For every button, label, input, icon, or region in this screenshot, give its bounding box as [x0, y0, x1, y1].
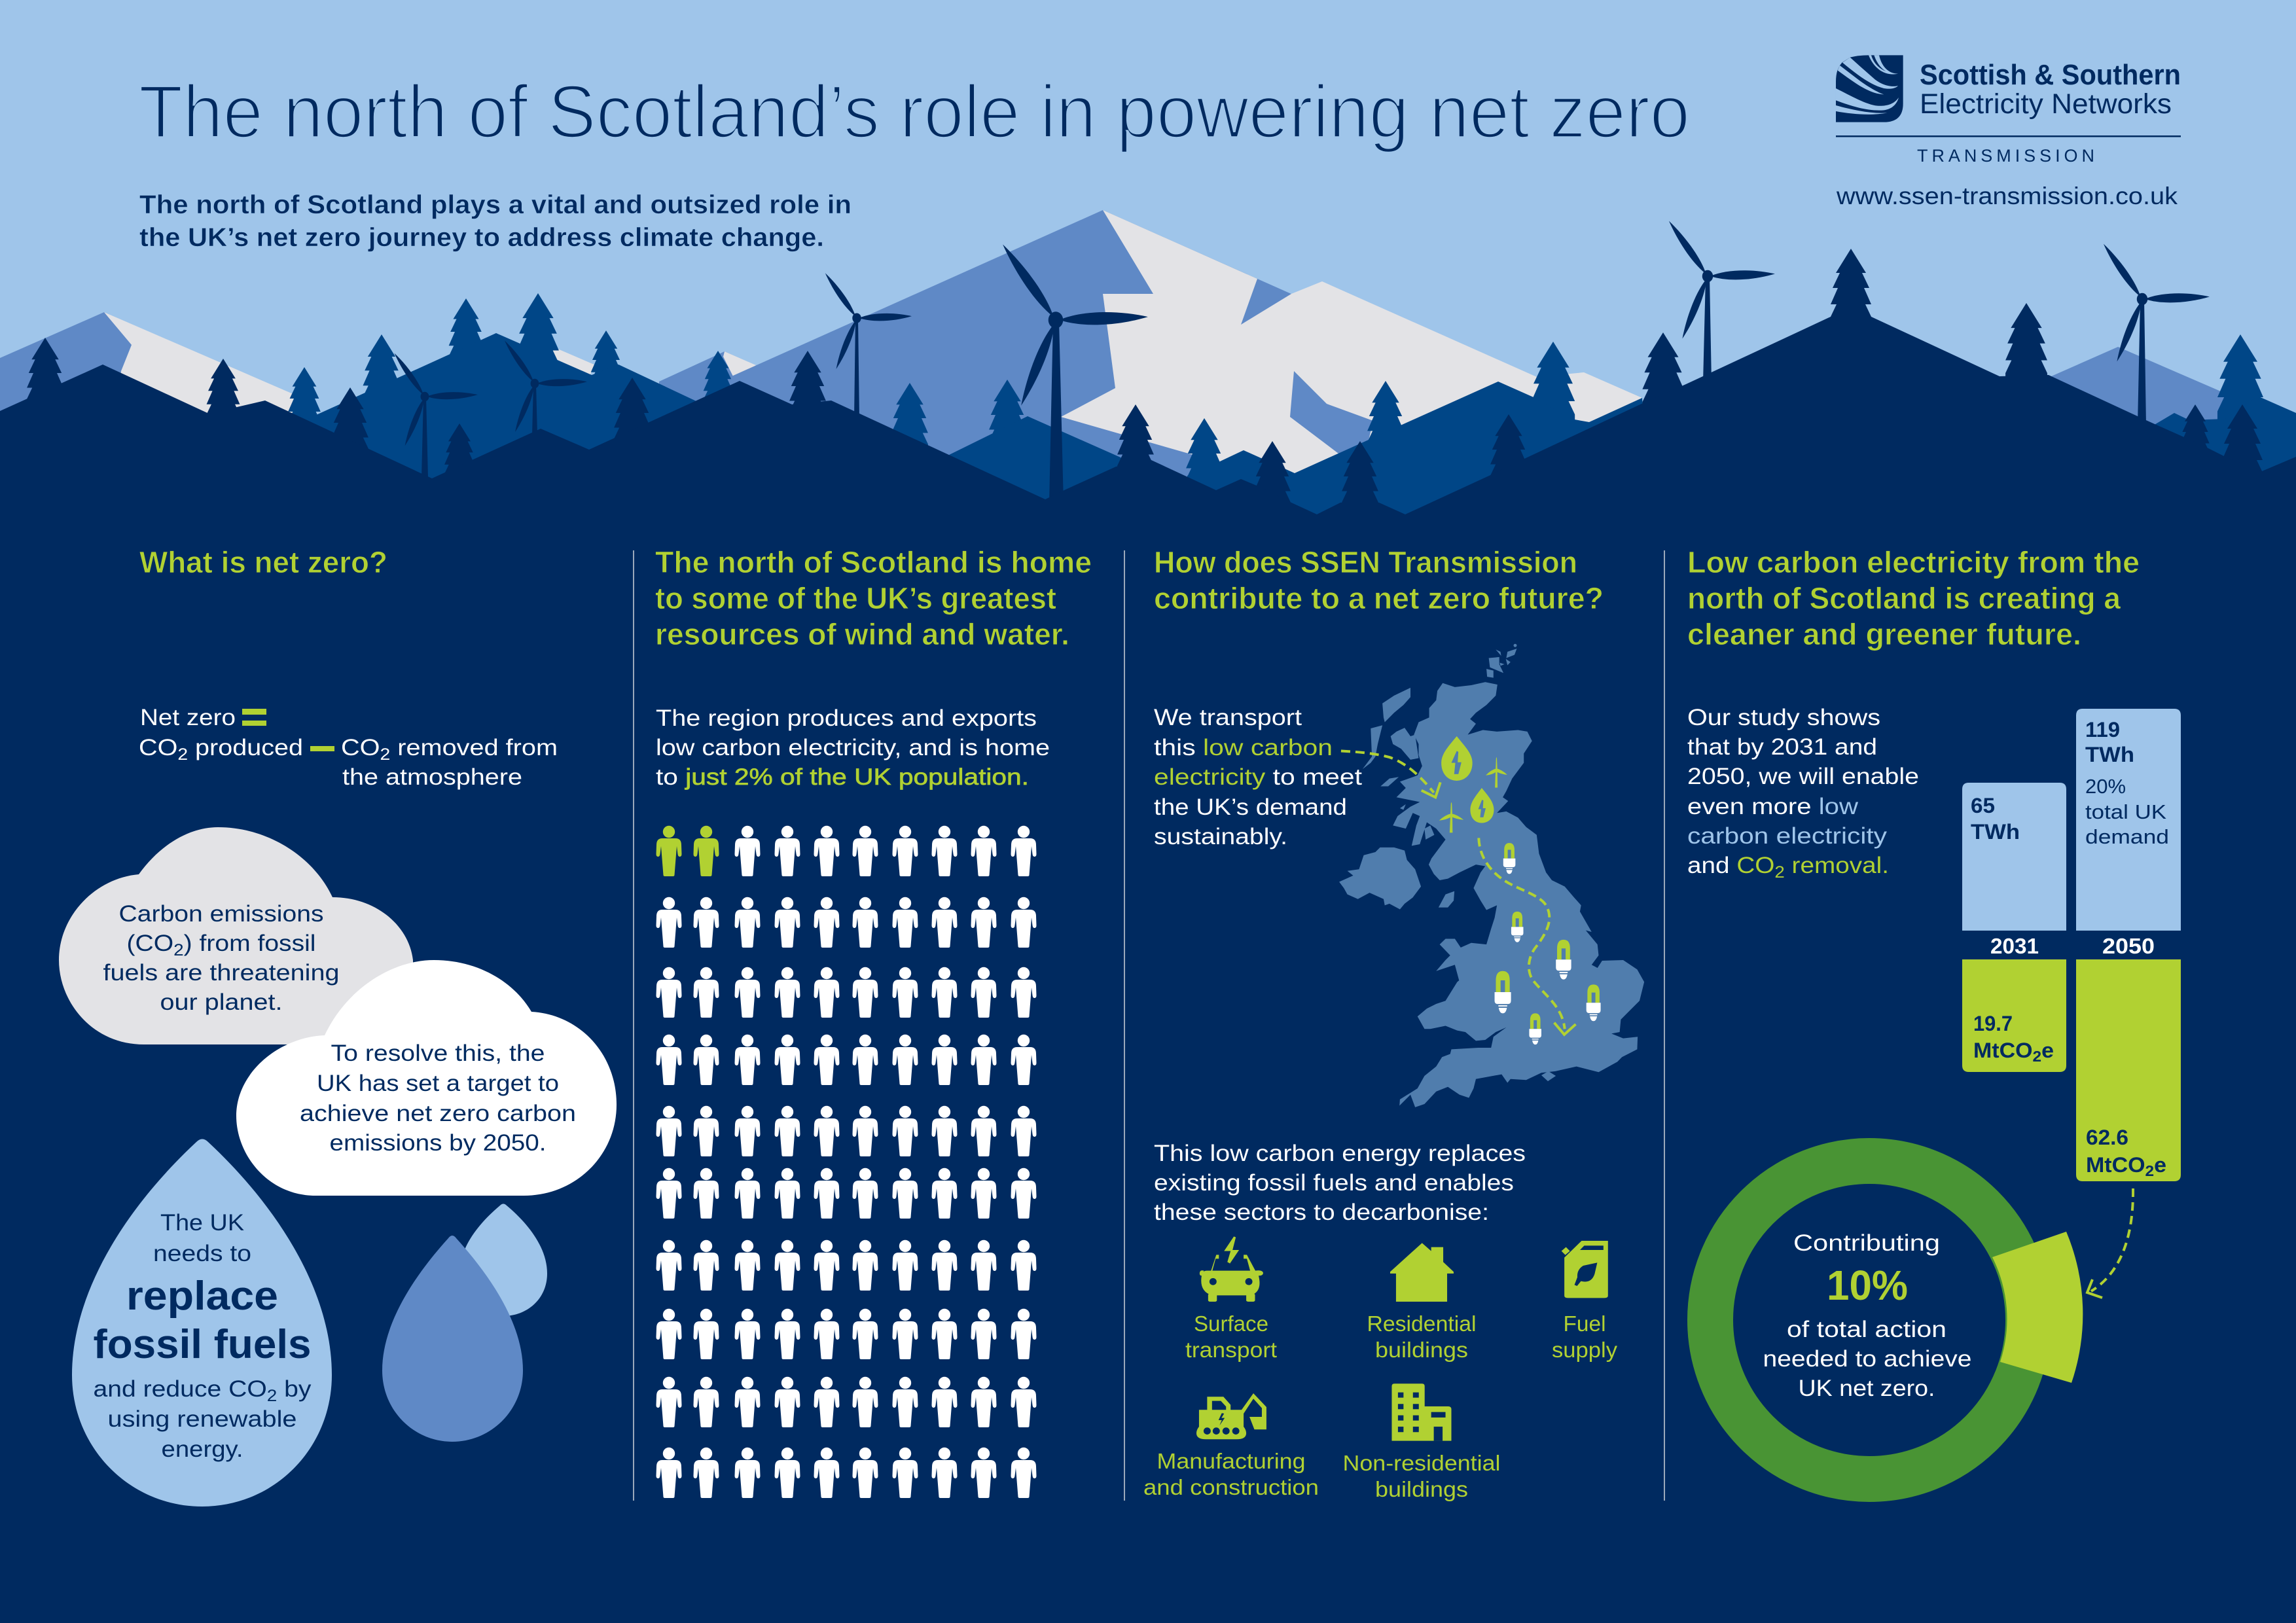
droplet with text: using renewable	[107, 1406, 297, 1432]
heading: to some of the UK’s greatest	[655, 581, 1056, 615]
bar: 65 TWh 2031	[1962, 783, 2066, 931]
cloud: white: emissions by 2050.	[330, 1130, 546, 1156]
cloud: grey: 2	[173, 941, 184, 959]
sector labels	[1143, 1311, 1618, 1501]
body text: sectors intro: existing fossil fuels and enables	[1154, 1170, 1514, 1196]
droplet with text: fossil fuels	[93, 1322, 311, 1367]
equation: the atmosphere	[342, 764, 522, 790]
icon: small water drops	[382, 1204, 547, 1442]
heading	[1154, 545, 1604, 615]
front navy ridge	[0, 317, 2296, 524]
bar: 65 TWh 2031: TWh	[1971, 820, 2020, 844]
icon: non-residential building	[1391, 1383, 1452, 1441]
mountain: far left peak	[0, 312, 308, 458]
body text: that by 2031 and	[1687, 734, 1877, 760]
cloud: grey: (CO	[127, 931, 169, 956]
bar chart: electricity and CO2 removal	[1962, 709, 2181, 1181]
donut chart: 10 percent	[1710, 1161, 2083, 1479]
logo: Scottish and Southern Electricity Networks Transmission	[1836, 55, 2181, 209]
bar: 119 TWh 2050: 119	[2085, 718, 2120, 741]
equation: produced	[188, 735, 303, 760]
mountain: small centre peak	[659, 351, 785, 458]
bar: 62.6 MtCO2e 2050	[2076, 959, 2181, 1181]
donut chart: 10 percent: 10%	[1827, 1262, 1908, 1309]
body text: even more low	[1687, 794, 1859, 819]
arrow: through England	[1479, 838, 1575, 1035]
body text: sustainably.	[1154, 824, 1287, 849]
snow: behind ridge	[550, 347, 596, 376]
body text	[1687, 705, 1919, 882]
body text: removal.	[1785, 853, 1889, 878]
cloud: white: achieve net zero carbon	[300, 1101, 576, 1126]
bar: 119 TWh 2050: 20%	[2085, 775, 2126, 798]
rock face in snow	[1290, 371, 1373, 454]
heading	[1687, 545, 2140, 651]
icon: excavator	[1196, 1393, 1266, 1439]
equation: 2	[177, 745, 188, 764]
trees: mid-blue row	[288, 293, 2263, 501]
cloud: white	[236, 960, 617, 1196]
droplet with text: replace	[126, 1274, 278, 1319]
equation: 2	[380, 745, 390, 764]
bar: 119 TWh 2050: demand	[2085, 825, 2169, 848]
droplet with text: and reduce CO	[94, 1376, 249, 1402]
intro text: The north of Scotland plays a vital and outsized role in	[139, 190, 852, 219]
illustration: mountain and forest landscape	[0, 210, 2296, 524]
body text	[1154, 705, 1362, 849]
icons: hydro drops	[1441, 736, 1494, 823]
sector labels: Fuel	[1563, 1311, 1606, 1336]
bar: 19.7 MtCO2e 2031: 2	[2033, 1048, 2041, 1065]
heading: resources of wind and water.	[655, 617, 1069, 651]
year labels: 2050	[2102, 934, 2155, 958]
panel: SSEN contribution	[1143, 545, 1644, 1501]
body text: Our study shows	[1687, 705, 1880, 730]
mountain: far right peak	[2029, 347, 2225, 458]
icon: fuel can	[1562, 1241, 1608, 1298]
droplet with text: The UK	[160, 1210, 244, 1236]
website: www.ssen-transmission.co.uk	[1836, 183, 2178, 209]
wind turbine 6	[2100, 242, 2210, 425]
heading: Low carbon electricity from the	[1687, 545, 2140, 579]
body text: We transport	[1154, 705, 1302, 730]
panel: what is net zero	[59, 545, 617, 1507]
donut chart: 10 percent: Contributing	[1793, 1230, 1940, 1256]
wind turbine 2: large	[999, 241, 1148, 504]
heading	[655, 545, 1092, 651]
body text: sectors intro: This low carbon energy replaces	[1154, 1141, 1526, 1166]
bar: 119 TWh 2050: total UK	[2085, 800, 2166, 823]
wind turbine 4	[503, 339, 587, 435]
logo wordmark line 2: Electricity Networks	[1920, 88, 2172, 120]
logo rule	[1836, 135, 2181, 137]
body text: low carbon electricity, and is home	[656, 735, 1050, 760]
sector labels: buildings	[1375, 1477, 1468, 1501]
map: landmass	[1339, 644, 1644, 1107]
bar: 62.6 MtCO2e 2050: e	[2154, 1153, 2166, 1177]
bar: 62.6 MtCO2e 2050: 2	[2145, 1162, 2154, 1179]
bar: 19.7 MtCO2e 2031: e	[2041, 1039, 2054, 1062]
body text: sectors intro: these sectors to decarbonise:	[1154, 1200, 1489, 1225]
cloud: grey	[59, 827, 413, 1044]
droplet with text: 2	[267, 1387, 277, 1405]
equation: CO	[341, 735, 376, 760]
snow: far left peak	[104, 312, 295, 458]
cloud: grey: our planet.	[160, 990, 283, 1015]
snow: small centre peak	[723, 351, 756, 382]
sector labels: supply	[1552, 1338, 1618, 1362]
sector labels: transport	[1185, 1338, 1277, 1362]
icon: residential house	[1390, 1243, 1454, 1302]
logo wordmark: Scottish & Southern	[1920, 59, 2181, 91]
body text: this low carbon	[1154, 735, 1333, 760]
forest ridge: centre	[942, 416, 1178, 517]
equation: removed from	[390, 735, 558, 760]
donut chart: 10 percent: needed to achieve	[1763, 1346, 1971, 1372]
sector labels: Residential	[1367, 1311, 1477, 1336]
forest ridge: left	[308, 333, 720, 497]
body text: to just 2% of the UK population.	[656, 764, 1029, 790]
bar: 119 TWh 2050: TWh	[2085, 743, 2134, 766]
logo mark	[1836, 55, 1903, 122]
wind turbine 3	[392, 351, 478, 478]
trees: navy row	[27, 249, 2263, 524]
body text: the UK’s demand	[1154, 794, 1347, 820]
heading: The north of Scotland is home	[655, 545, 1092, 579]
cloud: grey: Carbon emissions	[119, 901, 323, 927]
panel: resources of wind and water	[655, 545, 1092, 1498]
donut chart: 10 percent: of total action	[1787, 1317, 1946, 1342]
body text: 2050, we will enable	[1687, 764, 1919, 789]
equation: CO	[139, 735, 173, 760]
bar: 19.7 MtCO2e 2031: MtCO	[1973, 1039, 2029, 1062]
intro text	[139, 190, 852, 252]
sector labels: Non-residential	[1343, 1451, 1500, 1475]
heading: What is net zero?	[139, 545, 387, 579]
body text: electricity to meet	[1154, 764, 1362, 790]
equation: Net zero	[140, 705, 236, 730]
UK map	[1339, 644, 1644, 1107]
bar: 62.6 MtCO2e 2050: 62.6	[2086, 1126, 2128, 1149]
arrow: to ring	[2087, 1188, 2133, 1298]
cloud: white: To resolve this, the	[331, 1041, 545, 1066]
sector labels: Manufacturing	[1157, 1449, 1305, 1473]
equation	[139, 705, 558, 790]
bar: 19.7 MtCO2e 2031: 19.7	[1973, 1012, 2013, 1035]
intro text: the UK’s net zero journey to address climate change.	[139, 223, 824, 252]
cloud: white: UK has set a target to	[317, 1071, 559, 1096]
forest ridge: far right	[2153, 396, 2296, 497]
snow: main peak	[1061, 210, 1642, 478]
body text: 2	[1774, 863, 1785, 882]
wind turbine 1	[823, 272, 912, 419]
heading: How does SSEN Transmission	[1154, 545, 1577, 579]
wind turbine 5	[1666, 219, 1775, 383]
sector labels: buildings	[1375, 1338, 1468, 1362]
sector icons	[1196, 1236, 1608, 1441]
mountain: main blue peak	[720, 210, 1374, 497]
bar: 119 TWh 2050	[2076, 709, 2181, 931]
icons: map wind turbines	[1439, 757, 1507, 832]
cloud: grey: ) from fossil	[184, 931, 315, 956]
heading: contribute to a net zero future?	[1154, 581, 1604, 615]
panel: cleaner and greener future	[1687, 545, 2181, 1479]
droplet with text: energy.	[161, 1436, 243, 1462]
title: The north of Scotland’s role in powering net zero	[139, 71, 1690, 154]
logo subline: TRANSMISSION	[1917, 146, 2094, 166]
year labels: 2031	[1990, 934, 2039, 958]
sector labels: and construction	[1143, 1475, 1319, 1499]
heading: cleaner and greener future.	[1687, 617, 2081, 651]
body text: The region produces and exports	[656, 705, 1037, 731]
icon: surface transport car	[1200, 1236, 1263, 1302]
sector labels: Surface	[1194, 1311, 1268, 1336]
background: navy lower section	[0, 497, 2296, 1623]
year labels	[1990, 934, 2155, 958]
cloud: grey: fuels are threatening	[103, 960, 339, 986]
bar: 62.6 MtCO2e 2050: MtCO	[2086, 1153, 2142, 1177]
column dividers	[633, 550, 1665, 1501]
droplet with text	[72, 1139, 332, 1507]
background: sky	[0, 0, 2296, 524]
droplet with text: by	[277, 1376, 312, 1402]
forest ridge: centre right	[1187, 382, 1649, 524]
donut chart: 10 percent: UK net zero.	[1799, 1376, 1935, 1401]
droplet with text: needs to	[153, 1241, 251, 1266]
body text: and CO	[1687, 853, 1771, 878]
body text: carbon electricity	[1687, 823, 1888, 849]
icons: light bulbs	[1495, 843, 1601, 1044]
arrow: into Scotland	[1341, 751, 1441, 797]
pictogram: 2 in 100 people	[656, 826, 1037, 1498]
bar: 19.7 MtCO2e 2031	[1962, 959, 2066, 1072]
heading: north of Scotland is creating a	[1687, 581, 2121, 615]
body text	[656, 705, 1050, 790]
bar: 65 TWh 2031: 65	[1971, 794, 1995, 817]
body text: sectors intro	[1154, 1141, 1526, 1225]
